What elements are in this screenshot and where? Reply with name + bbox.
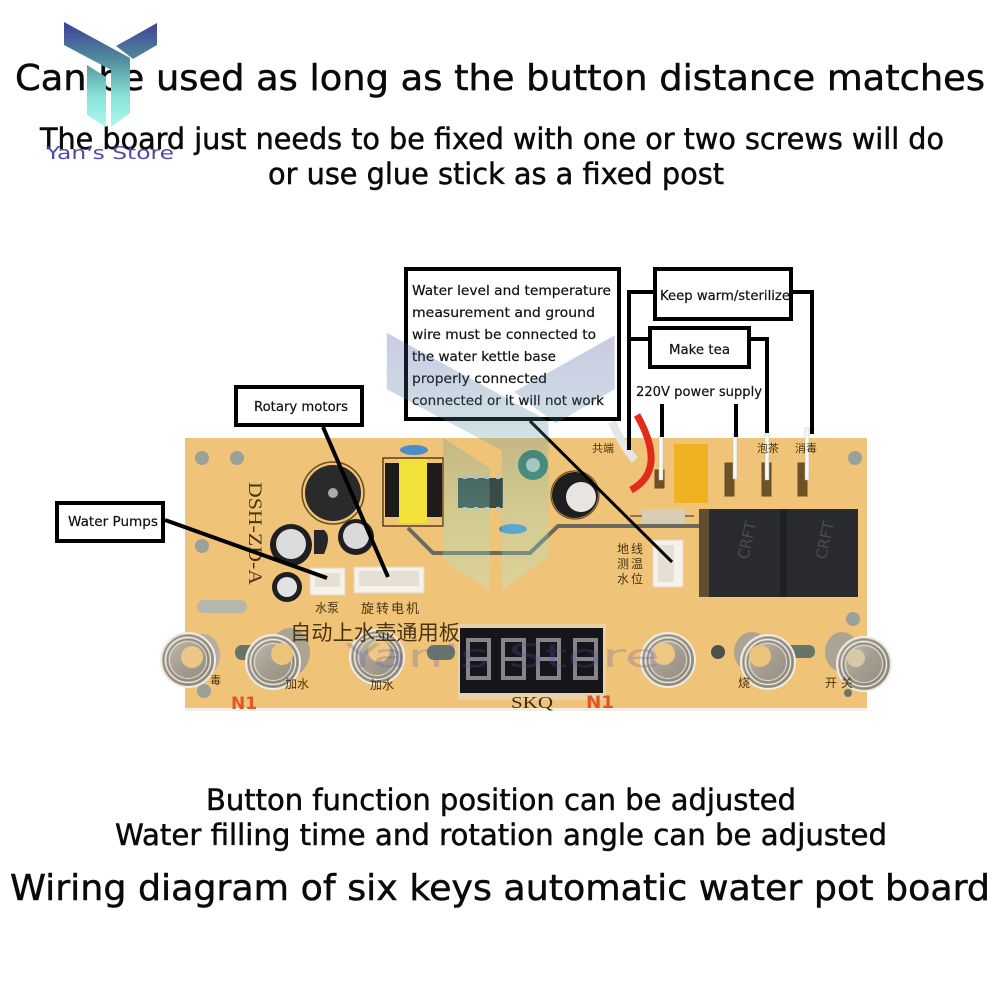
callout: water level note: properly connected (412, 371, 547, 387)
callout: water level note: Water level and temperature (412, 283, 611, 299)
text block: adjustment notes (115, 783, 887, 852)
board silkscreen labels (210, 441, 857, 714)
callout: rotary motors (236, 387, 362, 425)
transformer (383, 458, 443, 526)
mounting holes (195, 451, 862, 698)
board silkscreen labels: 水泵 (315, 601, 339, 615)
heading: bottom headline: Wiring diagram of six keys automatic water pot board (10, 868, 990, 909)
board silkscreen labels: 地线 (617, 542, 645, 556)
board silkscreen labels: SKQ (511, 693, 553, 712)
relays: CRFT (734, 519, 760, 561)
display (458, 624, 606, 700)
callout: water pumps: Water Pumps (68, 514, 158, 530)
board silkscreen labels: 毒 (210, 674, 221, 687)
heading: top headline: Can be used as long as the button distance matches (15, 58, 985, 99)
board silkscreen labels: N1 (231, 694, 257, 714)
connectors (310, 540, 683, 595)
board silkscreen labels: 泡茶 (757, 441, 779, 455)
blue ceramic capacitors (400, 445, 527, 534)
watermark: store name: Yan's Store (343, 637, 660, 675)
board silkscreen labels: 加水 (285, 677, 309, 691)
board silkscreen labels: 消毒 (795, 441, 817, 455)
callout: water level note: the water kettle base (412, 349, 556, 365)
board silkscreen labels: N1 (586, 693, 614, 713)
board silkscreen labels: 测温 (617, 557, 645, 571)
callout: make tea (650, 328, 749, 367)
logo: store mark (64, 22, 157, 127)
callout: make tea: Make tea (669, 342, 730, 358)
callout: keep warm (655, 269, 791, 319)
logo: store name: Yan's Store (45, 143, 174, 164)
callout: water level note: connected or it will not work (412, 393, 604, 409)
callout: water pumps (57, 503, 163, 541)
board silkscreen labels: 水位 (617, 571, 645, 586)
callout: connector lines (165, 292, 812, 578)
board silkscreen labels: DSH-ZD-A (244, 482, 265, 585)
text block: adjustment notes: Water filling time and rotation angle can be adjusted (115, 818, 887, 852)
board silkscreen labels: 烧 (738, 676, 750, 690)
spring buttons (161, 628, 891, 691)
terminal pins and wires (612, 415, 809, 496)
callout: water level note: wire must be connected to (412, 327, 596, 343)
yellow capacitor (674, 444, 708, 503)
board silkscreen labels: 开关 (825, 676, 857, 690)
capacitors (270, 450, 599, 602)
board trace (408, 526, 700, 553)
board silkscreen labels: 旋转电机 (361, 601, 421, 616)
fuse (630, 509, 694, 523)
panel: circuit board photo (161, 415, 891, 714)
IC chip (458, 474, 503, 512)
relays (699, 509, 858, 597)
callout: water level note: measurement and ground (412, 305, 595, 321)
text block: screw mounting note: or use glue stick as a fixed post (268, 157, 724, 191)
board silkscreen labels: 加水 (370, 678, 394, 692)
board silkscreen labels: 自动上水壶通用板 (290, 622, 460, 645)
board substrate (185, 438, 867, 708)
buzzer (302, 462, 364, 524)
callout: keep warm: Keep warm/sterilize (660, 288, 790, 304)
label: power supply: 220V power supply (636, 384, 762, 400)
relays: CRFT (812, 519, 838, 561)
watermark: store logo mark (387, 333, 615, 590)
callout: rotary motors: Rotary motors (254, 399, 348, 415)
board silkscreen labels: 共端 (592, 442, 614, 455)
text block: screw mounting note (39, 122, 944, 191)
text block: adjustment notes: Button function position can be adjusted (206, 783, 796, 817)
callout: water level note (406, 269, 619, 419)
text block: screw mounting note: The board just needs to be fixed with one or two screws will do (39, 122, 944, 156)
